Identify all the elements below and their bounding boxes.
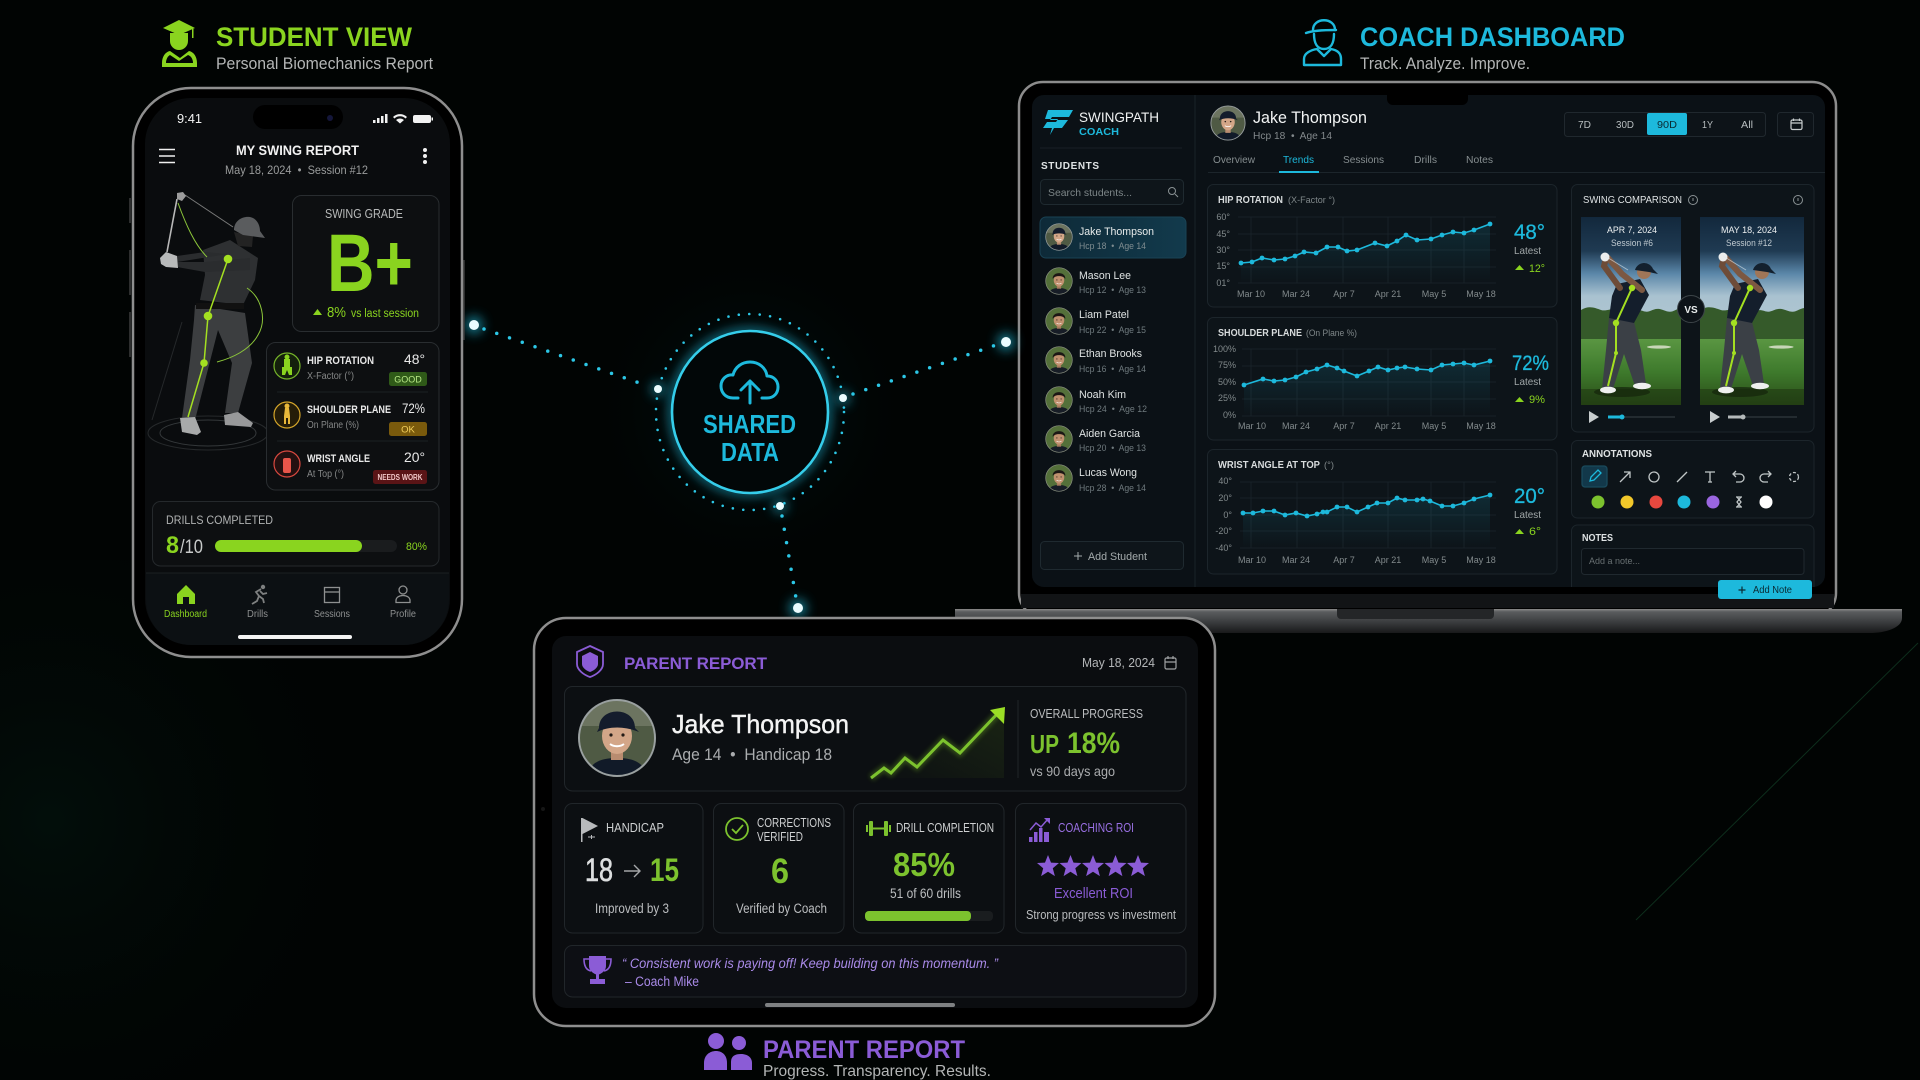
y axis labels: 75%	[1218, 360, 1236, 370]
button: add student	[1040, 542, 1184, 570]
student row: Mason Lee	[1045, 267, 1146, 295]
button: calendar	[1778, 112, 1814, 136]
laptop base	[955, 609, 1902, 633]
navigation tabs: Sessions	[1343, 154, 1384, 166]
chart title: (On Plane %)	[1306, 328, 1357, 339]
line: hip rotation trend	[1241, 224, 1490, 283]
phone: student view device	[130, 88, 464, 657]
status icons	[373, 114, 433, 124]
hub: shared data	[656, 314, 844, 510]
latest value: 48 degrees: 12°	[1529, 263, 1545, 275]
icon: check circle	[726, 818, 748, 840]
y axis labels	[1213, 344, 1236, 420]
panel: annotations	[1572, 440, 1814, 518]
latest value: 72 percent: Latest	[1514, 376, 1541, 388]
chart title	[1218, 195, 1335, 206]
x axis labels: Apr 21	[1375, 555, 1401, 565]
nav: drills	[247, 585, 268, 620]
swing photo: May 18	[1700, 217, 1804, 405]
date range selector: All	[1741, 119, 1753, 131]
icon: parents	[704, 1033, 752, 1070]
metric: shoulder plane: OK	[401, 424, 416, 436]
button: add student: Add Student	[1088, 551, 1147, 563]
nav: sessions: Sessions	[314, 609, 350, 620]
versus badge: VS	[1684, 305, 1698, 316]
hub ring	[672, 331, 828, 493]
hub glow	[672, 331, 828, 493]
progress bar	[215, 540, 397, 552]
y axis labels: 15°	[1216, 261, 1230, 271]
button: add note: Add Note	[1753, 584, 1792, 596]
tool icons	[1582, 466, 1798, 487]
dotted outer ring	[656, 314, 844, 510]
trend compared with last session: 8%	[327, 304, 346, 321]
heading: coach dashboard	[1304, 20, 1625, 73]
icon: purple shield	[577, 646, 603, 677]
date range selector: 90D	[1657, 119, 1677, 131]
metric: hip rotation	[274, 351, 427, 386]
date range selector: 30D	[1616, 119, 1634, 131]
student row: Aiden Garcia: Hcp 20 • Age 13	[1079, 443, 1146, 453]
chart title: WRIST ANGLE AT TOP	[1218, 460, 1320, 471]
student avatar	[577, 698, 657, 778]
label: VERIFIED	[757, 830, 803, 844]
latest value: 48 degrees: Latest	[1514, 245, 1541, 257]
nav: profile	[390, 586, 416, 620]
y axis labels: -40°	[1215, 543, 1232, 553]
label: HANDICAP	[606, 821, 664, 835]
label: COACHING ROI	[1058, 821, 1134, 835]
menu icon	[159, 150, 175, 162]
y axis labels: 25%	[1218, 393, 1236, 403]
date range selector	[1564, 112, 1766, 136]
sidebar: students	[1040, 95, 1195, 587]
label: CORRECTIONS	[757, 816, 831, 830]
nav: profile: Profile	[390, 609, 416, 620]
navigation tabs: Notes	[1466, 154, 1493, 166]
student row: Noah Kim: Hcp 24 • Age 12	[1079, 404, 1147, 414]
bottom navigation	[146, 573, 449, 645]
overall progress stat: vs 90 days ago	[1030, 763, 1115, 779]
panel: notes	[1572, 525, 1814, 587]
overall progress stat: OVERALL PROGRESS	[1030, 706, 1143, 721]
student row: Aiden Garcia	[1045, 425, 1146, 453]
dashboard header: student profile: Hcp 18 • Age 14	[1253, 130, 1332, 142]
latest value: 20 degrees	[1514, 485, 1545, 538]
icon: student with graduation cap	[162, 20, 197, 67]
phone side buttons	[130, 198, 464, 357]
latest value: 72 percent: 9%	[1529, 394, 1545, 406]
heading: student view	[162, 20, 433, 73]
title: STUDENT VIEW	[216, 22, 412, 52]
metric: wrist angle	[274, 449, 427, 484]
panel title: SWING COMPARISON	[1583, 194, 1682, 206]
student row: Lucas Wong: Lucas Wong	[1079, 467, 1137, 479]
five star rating	[1037, 855, 1149, 876]
card: swing metrics	[266, 342, 439, 490]
metric: shoulder plane	[274, 400, 427, 436]
latest value: 72 percent: 72%	[1512, 352, 1549, 375]
icon: coach with cap	[1304, 20, 1341, 65]
chart title: (°)	[1324, 460, 1334, 471]
metric: shoulder plane: On Plane (%)	[307, 420, 359, 431]
caption: Verified by Coach	[736, 901, 827, 916]
metric: wrist angle: WRIST ANGLE	[307, 453, 370, 465]
handicap change: 15	[650, 852, 679, 888]
y axis labels: 0°	[1223, 510, 1232, 520]
count: /10	[180, 537, 203, 558]
icon: cloud upload	[721, 362, 778, 403]
x axis labels: Mar 10	[1238, 555, 1266, 565]
title: PARENT REPORT	[763, 1036, 965, 1064]
y axis labels	[1215, 476, 1232, 553]
icon: flag	[581, 818, 598, 842]
student row: Lucas Wong: Hcp 28 • Age 14	[1079, 483, 1146, 493]
student row: Ethan Brooks: Hcp 16 • Age 14	[1079, 364, 1146, 374]
x axis labels: Apr 7	[1333, 421, 1355, 431]
caption: Strong progress vs investment	[1026, 908, 1176, 922]
panel: swing comparison	[1572, 184, 1814, 432]
note input: Add a note...	[1589, 556, 1640, 567]
overall progress stat: UP	[1030, 729, 1059, 759]
swing photo: May 18: Session #12	[1726, 238, 1772, 248]
note input	[1582, 548, 1804, 574]
card: handicap	[564, 804, 703, 933]
x axis labels: May 18	[1466, 289, 1496, 299]
metric: hip rotation: X-Factor (°)	[307, 371, 354, 382]
status time: 9:41	[177, 111, 202, 126]
latest value: 72 percent	[1512, 352, 1549, 406]
nav: dashboard: Dashboard	[164, 609, 207, 620]
subtitle: Progress. Transparency. Results.	[763, 1063, 991, 1080]
date range selector: 7D	[1578, 119, 1591, 131]
card: coach quote	[564, 946, 1186, 997]
handicap change	[585, 852, 679, 888]
count: 6	[771, 852, 789, 891]
latest value: 20 degrees: 6°	[1529, 526, 1541, 538]
student row: Lucas Wong	[1045, 464, 1146, 493]
metric: shoulder plane: SHOULDER PLANE	[307, 404, 391, 416]
y axis labels: -20°	[1215, 526, 1232, 536]
student row: Mason Lee: Hcp 12 • Age 13	[1079, 285, 1146, 295]
connector nodes	[466, 317, 1014, 616]
panel title: NOTES	[1582, 532, 1613, 544]
trend compared with last session: vs last session	[351, 308, 419, 320]
metric: wrist angle: 20°	[404, 449, 425, 465]
student row: Noah Kim	[1045, 386, 1147, 414]
navigation tabs: Overview	[1213, 154, 1255, 166]
y axis labels: 20°	[1218, 493, 1232, 503]
x axis labels: Apr 7	[1333, 555, 1355, 565]
x axis labels: Mar 24	[1282, 289, 1310, 299]
label: SHARED	[703, 409, 796, 439]
golfer illustration with swing path	[148, 192, 268, 450]
connector lines to shared data	[484, 329, 996, 598]
x axis labels: Mar 10	[1238, 421, 1266, 431]
student row: Liam Patel	[1045, 307, 1146, 335]
metric: wrist angle: At Top (°)	[307, 469, 344, 480]
card: coaching roi	[1016, 804, 1186, 933]
dynamic island	[253, 105, 343, 129]
grade value: B+	[327, 218, 413, 309]
nav: dashboard	[164, 585, 207, 620]
button: add note	[1718, 580, 1812, 599]
student row: Jake Thompson, selected: Jake Thompson	[1079, 226, 1154, 238]
student name: Jake Thompson	[672, 709, 849, 739]
chart: rising progress arrow	[871, 707, 1005, 778]
navigation tabs: Trends	[1283, 154, 1314, 166]
metric: shoulder plane: 72%	[402, 400, 425, 416]
x axis labels: Mar 10	[1237, 289, 1265, 299]
x axis labels: May 5	[1422, 555, 1446, 565]
dashboard header: student profile: Jake Thompson	[1253, 109, 1367, 127]
label: DRILLS COMPLETED	[166, 513, 273, 527]
label: SWING GRADE	[325, 207, 403, 221]
report date: May 18, 2024	[1082, 655, 1155, 670]
chart title	[1218, 328, 1357, 339]
student row: Liam Patel: Hcp 22 • Age 15	[1079, 325, 1146, 335]
swing photo: April 7: Session #6	[1611, 238, 1653, 248]
y axis labels: 45°	[1216, 229, 1230, 239]
overall progress stat: 18%	[1067, 727, 1120, 760]
latest value: 48 degrees	[1514, 221, 1545, 275]
y axis labels: 100%	[1213, 344, 1236, 354]
report title: PARENT REPORT	[624, 654, 768, 673]
title: COACH DASHBOARD	[1360, 22, 1625, 52]
icon: calendar	[1165, 656, 1176, 669]
chart panel: wrist angle at top	[1208, 450, 1557, 574]
x axis labels: Apr 7	[1333, 289, 1355, 299]
percent: 80%	[406, 541, 427, 553]
card: student profile	[564, 686, 1186, 791]
x axis labels: May 5	[1422, 421, 1446, 431]
x axis labels: Mar 24	[1282, 555, 1310, 565]
y axis labels	[1216, 212, 1230, 288]
metric: hip rotation: 48°	[404, 351, 425, 367]
y axis labels: 01°	[1216, 278, 1230, 288]
line: wrist angle trend	[1243, 495, 1490, 548]
card: drills completed	[152, 502, 439, 566]
colour swatches	[1592, 496, 1772, 508]
icon: rising bar chart	[1029, 818, 1050, 842]
logo: swingpath: COACH	[1079, 126, 1119, 138]
metric: wrist angle: NEEDS WORK	[378, 473, 423, 482]
latest value: 20 degrees: Latest	[1514, 509, 1541, 521]
x axis labels: Apr 21	[1375, 421, 1401, 431]
line: shoulder plane trend	[1244, 361, 1490, 416]
y axis labels: 30°	[1216, 245, 1230, 255]
home indicator	[238, 635, 352, 639]
icon: trophy	[584, 956, 611, 984]
swing photo: April 7: APR 7, 2024	[1607, 225, 1657, 236]
metric: hip rotation: HIP ROTATION	[307, 355, 374, 367]
subtitle: Personal Biomechanics Report	[216, 55, 433, 73]
more options icon	[423, 148, 427, 164]
heading: parent report	[704, 1033, 991, 1080]
logo: swingpath	[1043, 109, 1159, 138]
chart panel: hip rotation	[1208, 184, 1557, 307]
count: 8	[166, 532, 179, 559]
trend compared with last session	[313, 304, 419, 321]
navigation tabs: Drills	[1414, 154, 1437, 166]
latest value: 48 degrees: 48°	[1514, 221, 1545, 244]
home indicator	[765, 1003, 955, 1007]
metric: hip rotation: GOOD	[394, 374, 422, 384]
panel title: ANNOTATIONS	[1582, 448, 1652, 460]
chart title: HIP ROTATION	[1218, 195, 1283, 206]
nav: drills: Drills	[247, 609, 268, 620]
student row: Noah Kim: Noah Kim	[1079, 389, 1126, 401]
x axis labels	[1238, 555, 1496, 565]
y axis labels: 60°	[1216, 212, 1230, 222]
x axis labels: May 18	[1466, 555, 1496, 565]
overall progress stat	[1030, 706, 1143, 779]
screen subtitle: May 18, 2024 • Session #12	[225, 163, 368, 177]
x axis labels: Mar 24	[1282, 421, 1310, 431]
student row: Jake Thompson, selected: Hcp 18 • Age 14	[1079, 241, 1146, 251]
count	[166, 532, 203, 559]
y axis labels: 0%	[1223, 410, 1236, 420]
icon: dumbbell	[866, 821, 891, 836]
laptop: coach dashboard device	[955, 82, 1902, 633]
swing photo: May 18: MAY 18, 2024	[1721, 225, 1777, 236]
date range selector: 1Y	[1702, 119, 1713, 131]
versus badge	[1678, 296, 1704, 322]
card: drill completion	[854, 804, 1004, 933]
student row: Aiden Garcia: Aiden Garcia	[1079, 428, 1141, 440]
y axis labels: 40°	[1218, 476, 1232, 486]
student row: Mason Lee: Mason Lee	[1079, 270, 1131, 282]
progress bar	[865, 911, 993, 921]
quote text: “ Consistent work is paying off! Keep building on this momentum. ”	[622, 956, 998, 971]
label: students: STUDENTS	[1041, 161, 1099, 172]
caption: 51 of 60 drills	[890, 885, 961, 901]
label: DRILL COMPLETION	[896, 821, 994, 835]
student details: Age 14 • Handicap 18	[672, 746, 832, 764]
x axis labels: May 18	[1466, 421, 1496, 431]
x axis labels	[1237, 289, 1496, 299]
logo: swingpath: SWINGPATH	[1079, 109, 1159, 125]
latest value: 20 degrees: 20°	[1514, 485, 1545, 508]
label: DATA	[721, 437, 779, 467]
student row: Jake Thompson, selected	[1040, 217, 1186, 258]
student row: Ethan Brooks: Ethan Brooks	[1079, 348, 1142, 360]
quote attribution: – Coach Mike	[625, 974, 699, 989]
screen title: MY SWING REPORT	[236, 143, 360, 158]
chart title: SHOULDER PLANE	[1218, 328, 1302, 339]
handicap change: 18	[585, 852, 613, 888]
y axis labels: 50%	[1218, 377, 1236, 387]
student row: Ethan Brooks	[1045, 346, 1146, 374]
x axis labels	[1238, 421, 1496, 431]
tablet: parent report device	[534, 618, 1215, 1026]
search box: Search students...	[1048, 187, 1132, 199]
chart panel: shoulder plane	[1208, 318, 1557, 440]
x axis labels: May 5	[1422, 289, 1446, 299]
card: corrections verified	[714, 804, 844, 933]
x axis labels: Apr 21	[1375, 289, 1401, 299]
student row: Liam Patel: Liam Patel	[1079, 309, 1129, 321]
laptop camera notch	[1387, 95, 1468, 105]
search box	[1040, 180, 1184, 204]
video controls	[1589, 411, 1797, 423]
percent: 85%	[893, 846, 955, 883]
caption: Improved by 3	[595, 901, 669, 916]
swing photo: April 7	[1581, 217, 1681, 405]
icon: info	[1688, 196, 1802, 204]
subtitle: Track. Analyze. Improve.	[1360, 55, 1530, 73]
rating label: Excellent ROI	[1054, 885, 1133, 902]
chart title: (X-Factor °)	[1288, 195, 1335, 206]
nav: sessions	[314, 588, 350, 620]
card: swing grade	[292, 196, 439, 332]
dashboard header: student profile	[1210, 105, 1367, 142]
navigation tabs	[1208, 154, 1825, 173]
